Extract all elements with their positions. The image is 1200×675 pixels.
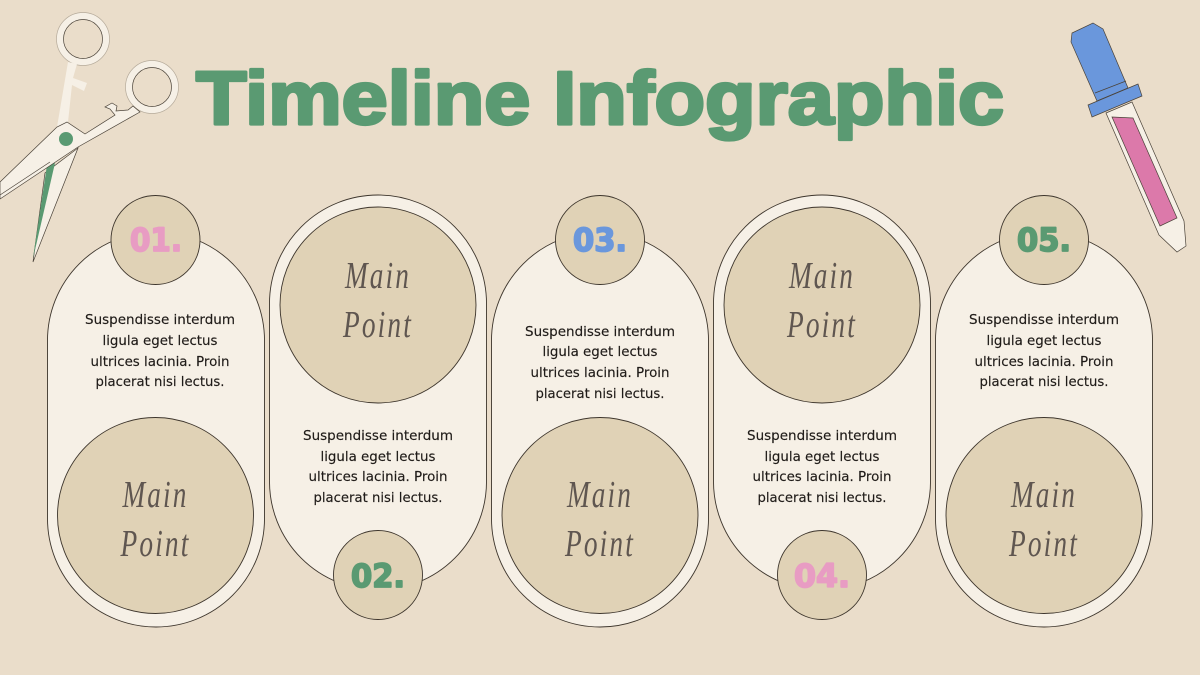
icon: dropper <box>1071 23 1186 252</box>
main point circle <box>946 418 1142 614</box>
text block: Suspendisse interdum <box>525 325 675 340</box>
main point circle <box>280 207 476 403</box>
text block: placerat nisi lectus. <box>980 375 1108 390</box>
main point circle: Point <box>786 304 857 346</box>
panel: step 2 <box>270 195 486 620</box>
panel: step 3 <box>492 196 708 627</box>
text block: ligula eget lectus <box>764 450 880 465</box>
text block: Suspendisse interdum <box>85 313 235 328</box>
number badge 01 <box>111 196 200 284</box>
number badge 03 <box>556 196 644 284</box>
main point circle: Main <box>344 255 411 297</box>
text block: placerat nisi lectus. <box>758 491 886 506</box>
text block: placerat nisi lectus. <box>96 375 224 390</box>
text block: ultrices lacinia. Proin <box>90 355 230 370</box>
title: Timeline Infographic <box>196 56 1004 140</box>
main point circle: Main <box>566 474 633 516</box>
text block: ligula eget lectus <box>542 345 658 360</box>
text block: Suspendisse interdum <box>747 429 897 444</box>
main point circle: Main <box>788 255 855 297</box>
main point circle: Main <box>1010 474 1077 516</box>
text block: ligula eget lectus <box>102 334 218 349</box>
main point circle <box>58 418 254 614</box>
number badge 02 <box>334 530 422 620</box>
number badge 01: 01. <box>130 221 182 259</box>
number badge 04 <box>778 530 866 620</box>
text block: Suspendisse interdum <box>969 313 1119 328</box>
text block: ultrices lacinia. Proin <box>752 470 892 485</box>
main point circle: Point <box>342 304 413 346</box>
panel: step 1 <box>48 196 264 627</box>
text block: ultrices lacinia. Proin <box>308 470 448 485</box>
number badge 05 <box>1000 196 1088 284</box>
main point circle: Point <box>1008 523 1079 565</box>
main point circle <box>502 418 698 614</box>
main point circle: Point <box>564 523 635 565</box>
panel: step 5 <box>936 196 1152 627</box>
text block: ultrices lacinia. Proin <box>530 366 670 381</box>
icon: scissors <box>0 12 178 262</box>
text block: placerat nisi lectus. <box>536 387 664 402</box>
number badge 04: 04. <box>794 557 850 595</box>
text block: Suspendisse interdum <box>303 429 453 444</box>
number badge 03: 03. <box>573 221 627 259</box>
main point circle <box>724 207 920 403</box>
panel: step 4 <box>714 195 930 620</box>
text block: ligula eget lectus <box>320 450 436 465</box>
number badge 02: 02. <box>351 557 405 595</box>
text block: ultrices lacinia. Proin <box>974 355 1114 370</box>
text block: ligula eget lectus <box>986 334 1102 349</box>
number badge 05: 05. <box>1017 221 1071 259</box>
text block: placerat nisi lectus. <box>314 491 442 506</box>
main point circle: Point <box>120 523 190 565</box>
main point circle: Main <box>122 474 188 516</box>
